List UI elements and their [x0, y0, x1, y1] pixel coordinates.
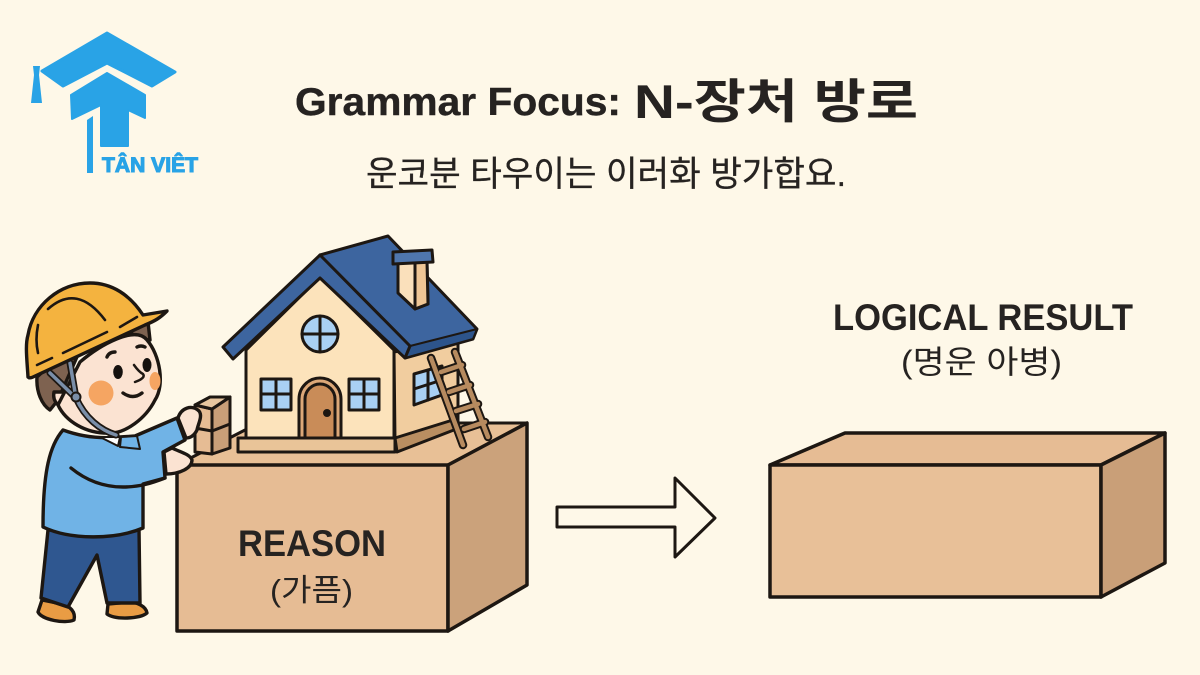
- logo tassel: [31, 66, 42, 103]
- shirt: [43, 418, 185, 537]
- upper hand: [178, 407, 201, 438]
- roof ridge line: [320, 255, 410, 358]
- title: [295, 75, 918, 128]
- right window bars: [349, 379, 379, 410]
- worker character: [26, 283, 201, 622]
- title latin part: Grammar Focus:: [295, 81, 621, 124]
- cheek left: [88, 380, 114, 406]
- left shoe: [38, 600, 74, 622]
- house side wall: [394, 340, 458, 440]
- chimney shade: [415, 262, 428, 309]
- lower hand: [164, 448, 192, 474]
- round window glass: [302, 316, 338, 352]
- small box side: [212, 397, 230, 454]
- house base side: [395, 419, 459, 452]
- helmet strap: [50, 363, 116, 435]
- eye left: [113, 365, 123, 379]
- reason korean label: (가픔): [270, 573, 353, 608]
- eye right: [142, 358, 152, 372]
- box front face: [177, 465, 448, 631]
- logo bar: [87, 116, 93, 173]
- box top face: [177, 423, 527, 465]
- result box front face: [770, 465, 1101, 597]
- right window glass: [349, 379, 379, 410]
- right window: [349, 379, 379, 410]
- right shoe: [107, 602, 147, 618]
- left window bars: [261, 379, 291, 410]
- door: [299, 378, 341, 438]
- ladder: [431, 352, 488, 445]
- helmet strap fill: [50, 363, 116, 435]
- logo arrow: [71, 73, 145, 146]
- subtitle: 운코분 타우이는 이러화 방가합요.: [366, 155, 846, 194]
- round window bars: [302, 316, 338, 352]
- side window glass: [414, 366, 442, 405]
- arrow: [557, 478, 715, 557]
- logo wordmark: TÂN VIÊT: [102, 153, 198, 177]
- small box front: [195, 405, 212, 454]
- small box seam: [195, 424, 230, 431]
- chimney body: [398, 262, 428, 309]
- house front wall: [246, 277, 394, 438]
- logo: Tan Viet: [31, 33, 198, 177]
- house roof: [223, 236, 477, 359]
- strap buckle: [72, 392, 80, 402]
- title korean part: N-장처 방로: [634, 75, 918, 128]
- ladder outline: [431, 352, 488, 445]
- side window: [414, 366, 442, 405]
- result box top face: [770, 433, 1165, 465]
- face: [58, 335, 160, 433]
- ear: [54, 392, 72, 408]
- roof fascia: [405, 329, 477, 358]
- result korean label: (명운 아병): [901, 344, 1062, 380]
- logo graduation cap: [42, 33, 175, 86]
- shirt placket: [120, 436, 140, 449]
- hair back: [37, 350, 80, 410]
- chimney cap: [393, 250, 433, 264]
- nose: [134, 365, 144, 382]
- result label: LOGICAL RESULT: [833, 297, 1133, 338]
- hair front: [128, 322, 150, 340]
- helmet: [26, 283, 167, 378]
- house base front: [238, 438, 395, 452]
- reason label: REASON: [238, 523, 386, 564]
- mouth: [123, 393, 142, 396]
- left window glass: [261, 379, 291, 410]
- small box top: [195, 397, 230, 409]
- ladder wood: [431, 352, 488, 445]
- eyebrows: [107, 346, 145, 357]
- result box: [770, 433, 1165, 597]
- door frame: [299, 378, 341, 438]
- small stacked boxes: [195, 397, 230, 454]
- helmet markings: [36, 298, 137, 365]
- door panel: [305, 384, 335, 438]
- cheek right: [150, 372, 160, 390]
- result box side face: [1101, 433, 1165, 597]
- side window bars: [414, 370, 442, 400]
- left window: [261, 379, 291, 410]
- arm crease: [71, 468, 165, 487]
- round window: [302, 316, 338, 352]
- door knob: [324, 410, 330, 416]
- collar: [100, 437, 120, 446]
- trousers: [41, 528, 140, 607]
- chimney: [393, 250, 433, 309]
- house: [223, 236, 477, 452]
- reason box: [177, 423, 527, 631]
- box side face: [448, 423, 527, 631]
